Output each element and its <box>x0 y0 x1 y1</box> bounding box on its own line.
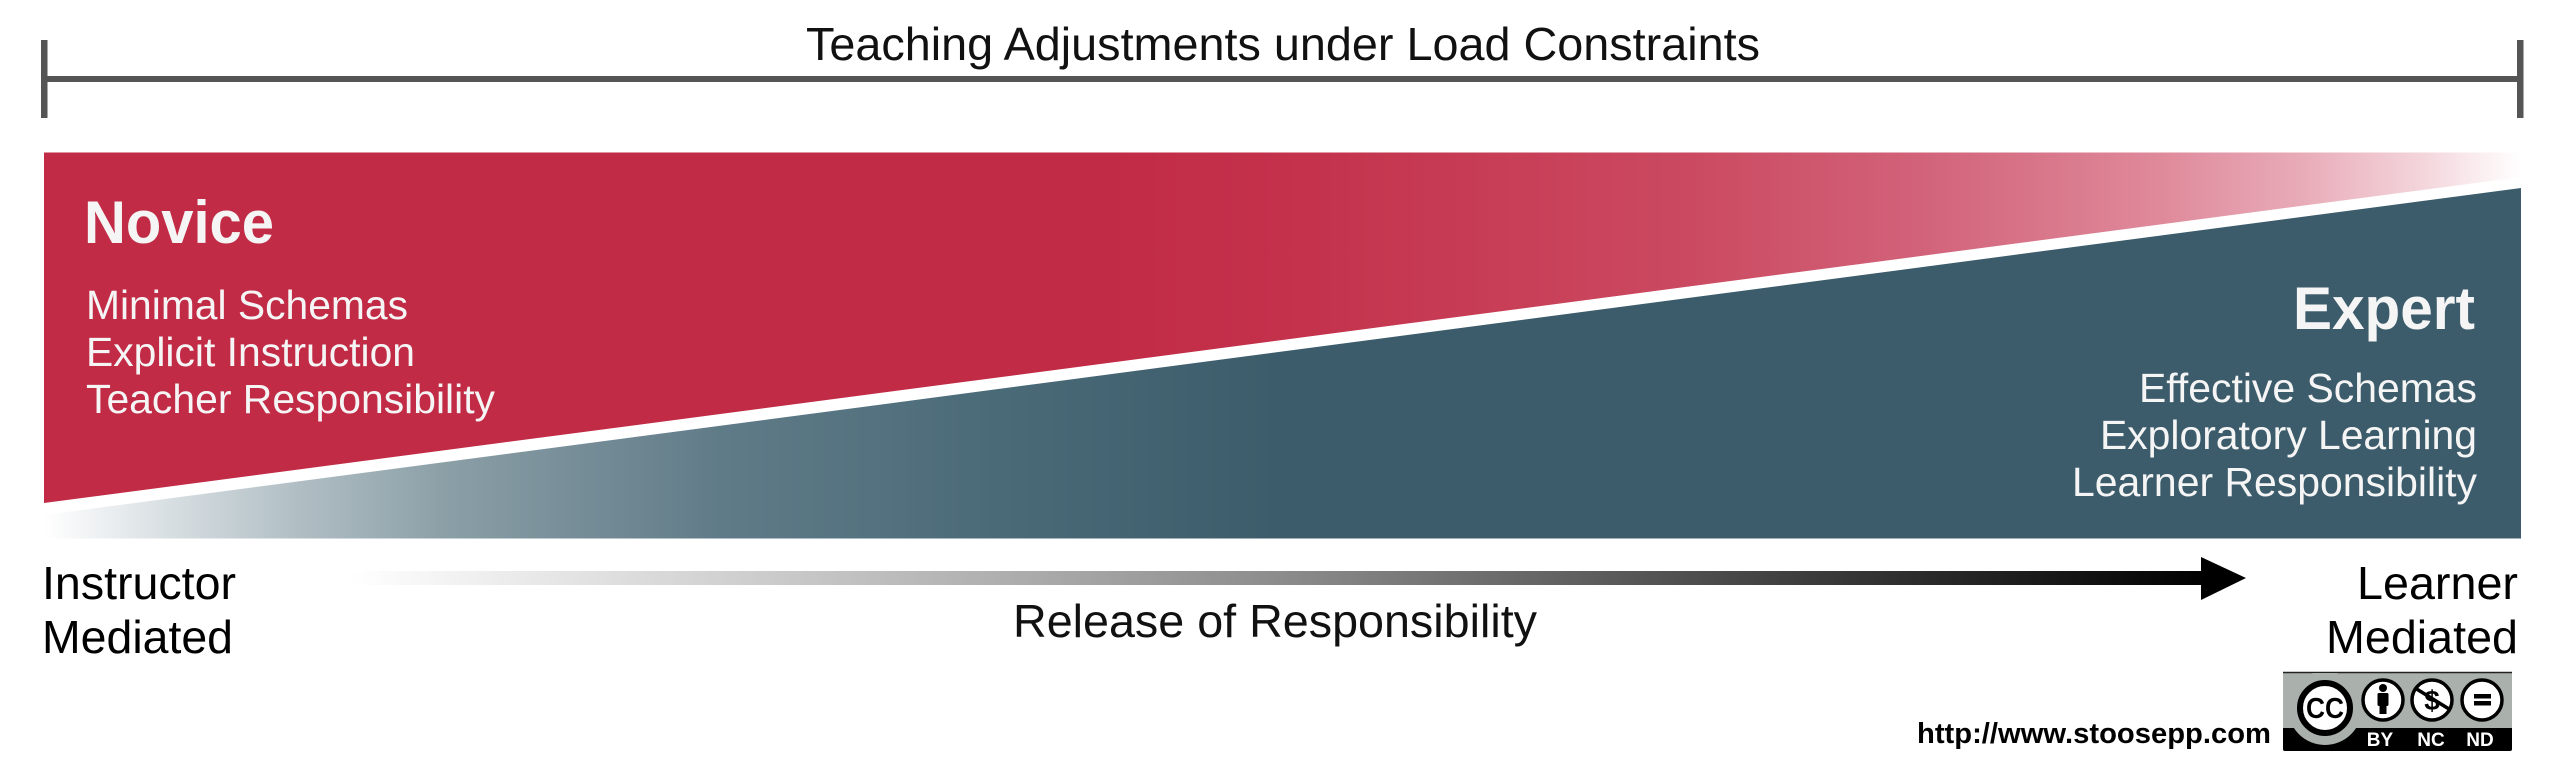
expert attributes <box>2072 365 2477 505</box>
icon: creative commons BY-NC-ND badge: NC <box>2417 730 2445 751</box>
icon: creative commons BY-NC-ND badge: BY <box>2367 730 2394 751</box>
panel: novice wedge <box>44 152 2521 503</box>
arrow: release of responsibility <box>350 557 2246 600</box>
title: Teaching Adjustments under Load Constraints <box>806 18 1760 70</box>
panel: expert wedge <box>44 188 2521 538</box>
expert attributes: Learner Responsibility <box>2072 459 2477 505</box>
icon: creative commons BY-NC-ND badge: $ <box>2424 685 2440 716</box>
novice attributes: Minimal Schemas <box>86 282 408 328</box>
instructor mediated label: Instructor <box>42 557 236 609</box>
instructor mediated label: Mediated <box>42 611 233 663</box>
novice heading: Novice <box>84 189 274 256</box>
arrow caption: Release of Responsibility <box>1013 595 1537 647</box>
bracket spanning the full width <box>41 40 2524 118</box>
novice attributes: Explicit Instruction <box>86 329 415 375</box>
icon: creative commons BY-NC-ND badge: ND <box>2466 730 2494 751</box>
website url: http://www.stoosepp.com <box>1917 718 2271 750</box>
learner mediated label: Mediated <box>2326 611 2518 663</box>
instructor mediated label <box>42 557 236 663</box>
icon: creative commons BY-NC-ND badge: CC <box>2306 693 2344 725</box>
novice attributes <box>86 282 495 422</box>
expert attributes: Exploratory Learning <box>2100 412 2477 458</box>
expert heading: Expert <box>2293 275 2475 342</box>
learner mediated label <box>2326 557 2518 663</box>
learner mediated label: Learner <box>2357 557 2518 609</box>
icon: creative commons BY-NC-ND badge <box>2283 671 2512 751</box>
expert attributes: Effective Schemas <box>2139 365 2477 411</box>
novice attributes: Teacher Responsibility <box>86 376 495 422</box>
